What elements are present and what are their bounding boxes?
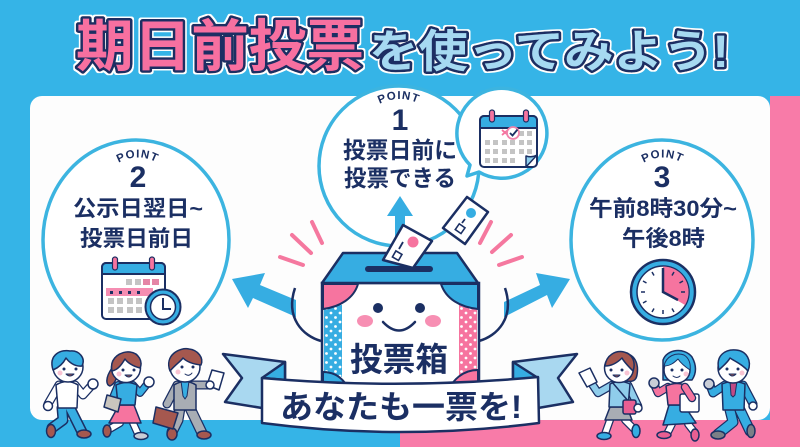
icon: calendar with check [480,110,537,167]
point 2 text: 公示日翌日~ [73,196,203,221]
point 3 text: 午前8時30分~ [589,196,737,221]
white panel [30,96,770,420]
speech bubble with calendar [457,88,547,178]
point 1 text [343,137,457,191]
person: woman in pink skirt [103,352,154,440]
point 2 label: POINT [116,150,159,162]
person: man in blue suit [704,350,757,439]
arrow: up [387,196,413,252]
panel: point 1 [317,88,480,248]
box lid [322,253,478,283]
point 3 label: POINT [641,150,684,162]
point 1 number: 1 [392,104,408,137]
point 2 text: 投票日前日 [80,226,193,251]
point 1 label: POINT [377,91,420,104]
banner tail left [223,354,285,408]
title [76,15,729,78]
point 3 text: 午後8時 [622,226,705,251]
banner tail right [513,354,577,408]
people: left group [44,349,224,440]
person: woman with tote bag [649,351,699,441]
panel: point 2 [41,138,231,342]
corner decorations [323,284,478,392]
arrow: right [504,273,570,317]
person: woman with ballot [579,352,642,440]
point 3 text [589,196,737,251]
banner text: あなたも一票を! [280,389,522,425]
slot [365,266,433,272]
people: right group [579,350,757,441]
sparkle rays [280,222,522,265]
point 1 text: 投票日前に [343,137,457,163]
ballot paper: blue [443,197,488,244]
point 3 number: 3 [654,161,670,194]
title: を使ってみよう! [369,26,729,77]
arrow: left [232,273,296,317]
box arms [292,288,508,341]
icon: calendar with clock [102,257,180,324]
point 2 text [73,196,203,251]
panel: point 3 [569,138,755,342]
dotted strips [324,305,477,377]
title: 期日前投票 [76,15,364,78]
person: businessman in grey suit [153,349,224,440]
ballot box character [292,253,508,398]
face [357,303,441,330]
icon: clock [631,260,695,324]
point 2 number: 2 [130,161,146,194]
banner ribbon [262,377,539,432]
point 1 text: 投票できる [344,165,456,191]
box label: 投票箱 [350,341,448,378]
box body [322,283,479,398]
banner [223,354,577,432]
person: boy in white sweater [44,351,98,438]
ballot paper: pink [383,225,432,268]
